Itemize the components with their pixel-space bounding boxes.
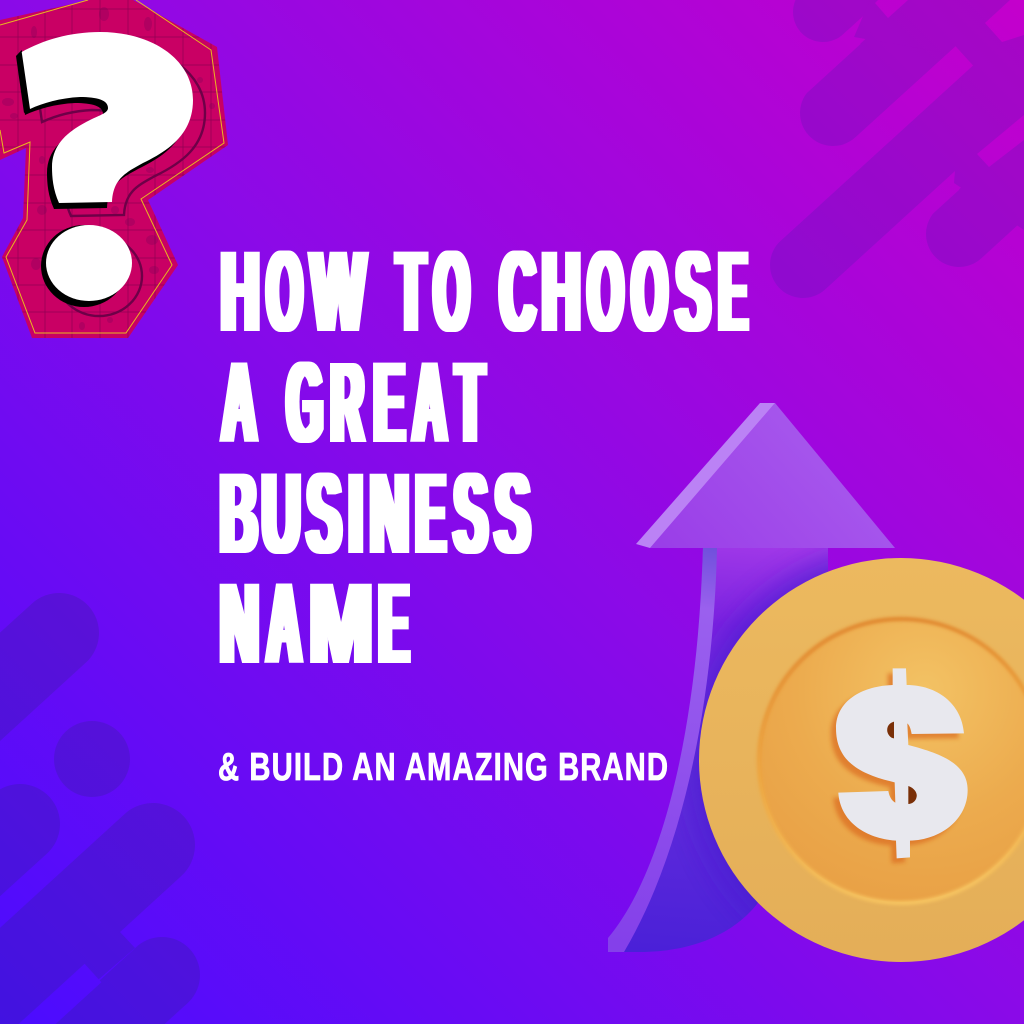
arrow head light bevel <box>636 403 775 548</box>
coin face <box>760 620 1024 902</box>
subtitle: & BUILD AN AMAZING BRAND <box>218 746 668 789</box>
title line 1: E <box>719 228 747 356</box>
title line 2 <box>219 339 488 467</box>
title line 1: T <box>397 228 425 356</box>
icon: rising arrow <box>608 403 895 952</box>
coin inner ring <box>759 619 1024 903</box>
title line 3: U <box>262 450 301 578</box>
title line 1: H <box>542 228 580 356</box>
icon: question mark badge <box>0 0 240 340</box>
icon: gold coin <box>699 558 1024 962</box>
badge yellow outline <box>0 0 224 333</box>
question mark white glyph <box>22 32 193 301</box>
title line 4 <box>220 560 411 688</box>
question mark black shadow <box>16 38 188 307</box>
title line 1: C <box>500 228 535 356</box>
title line 3: N <box>370 450 409 578</box>
title line 1: S <box>676 228 710 356</box>
title line 2: T <box>456 339 484 467</box>
title line 1: O <box>434 228 469 356</box>
title line 3: S <box>495 450 530 578</box>
icon: dollar sign <box>836 668 968 858</box>
title line 3 <box>219 450 532 578</box>
title line 3: E <box>416 450 445 578</box>
title line 1: O <box>588 228 623 356</box>
title line 3: B <box>220 450 257 578</box>
title line 2: E <box>374 339 404 467</box>
arrow light strip <box>608 548 717 952</box>
badge speckle texture <box>2 7 215 330</box>
arrow shaft <box>610 548 828 952</box>
badge grid texture <box>0 0 240 340</box>
decorative pills: bottom left <box>0 633 200 1024</box>
title line 4: N <box>220 560 259 688</box>
title line 4: E <box>378 560 408 688</box>
coin rim <box>699 558 1024 962</box>
title line 1: O <box>632 228 667 356</box>
question mark echo outline <box>34 45 205 316</box>
title line 1: H <box>221 228 259 356</box>
title line 2: A <box>413 339 446 467</box>
title line 2: R <box>331 339 363 467</box>
title line 4: M <box>308 560 372 688</box>
title <box>219 228 750 688</box>
arrow head <box>650 403 895 548</box>
title line 2: A <box>222 339 256 467</box>
title line 3: I <box>348 450 362 578</box>
coin shadow on arrow <box>688 548 828 904</box>
dollar sign shadow <box>831 673 963 863</box>
title line 3: S <box>454 450 487 578</box>
title line 2: G <box>287 339 323 467</box>
title line 4: A <box>267 560 301 688</box>
badge shape <box>0 0 228 338</box>
decorative pills: top right <box>803 0 1024 265</box>
title line 1 <box>220 228 750 356</box>
title line 1: O <box>267 228 302 356</box>
title line 1: W <box>311 228 366 356</box>
title line 3: S <box>307 450 341 578</box>
